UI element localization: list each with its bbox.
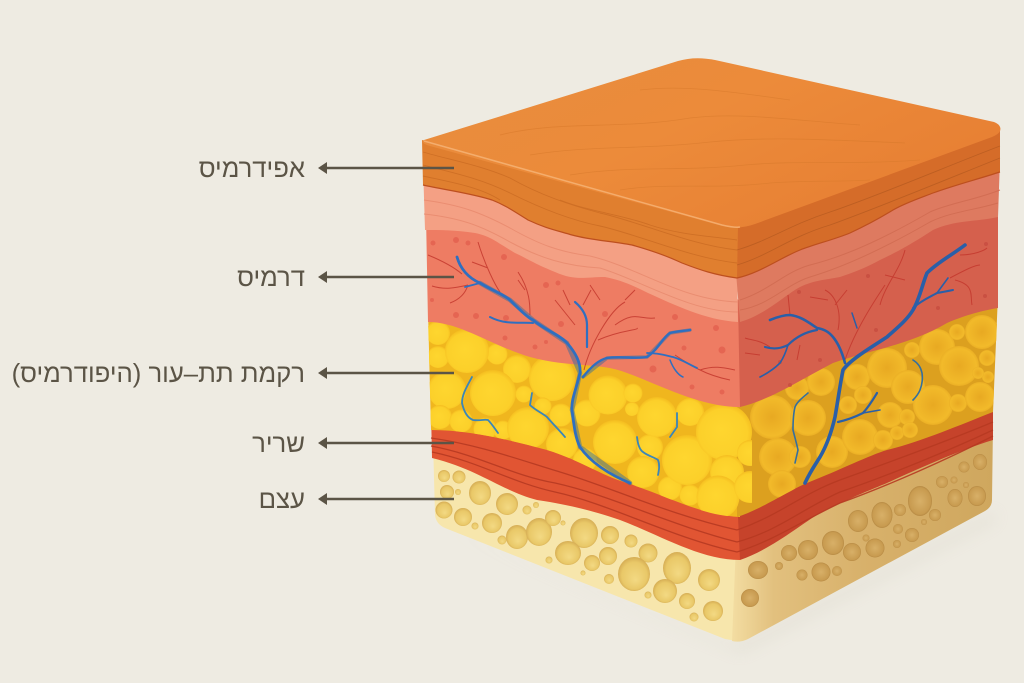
label: epidermis	[199, 155, 454, 183]
blood vessels	[457, 245, 965, 483]
label: bone: עצם	[259, 486, 305, 514]
skin cross-section cube	[422, 58, 1000, 652]
top surface grain	[500, 88, 920, 190]
fat cells right	[750, 315, 999, 498]
vessel outlines	[480, 283, 690, 483]
label: muscle: שריר	[252, 430, 305, 458]
layer: dermis	[426, 195, 998, 407]
top surface of skin	[423, 58, 1000, 228]
label: hypodermis: רקמת תת–עור (היפודרמיס)	[12, 360, 305, 388]
layer: muscle	[431, 395, 993, 560]
bone pores	[436, 470, 723, 622]
layer: upper dermis	[423, 160, 1000, 322]
label: dermis	[237, 264, 454, 292]
label: muscle	[252, 430, 454, 458]
cube shadow	[440, 512, 995, 652]
label: bone	[259, 486, 454, 514]
epidermis boundary line	[423, 172, 1000, 278]
layer: subcutaneous fat	[426, 295, 999, 518]
layer: epidermis	[422, 130, 1000, 278]
label: hypodermis	[12, 360, 454, 388]
layer: bone	[433, 425, 993, 642]
capillaries	[428, 242, 987, 380]
muscle fibres	[431, 422, 993, 552]
right veins	[760, 245, 965, 483]
dermis pores	[430, 237, 726, 394]
label: dermis: דרמיס	[237, 264, 305, 292]
fat cells left	[426, 321, 766, 518]
epidermis grain	[423, 146, 1000, 265]
front edge highlight	[424, 141, 740, 227]
left veins	[457, 257, 697, 483]
label: epidermis: אפידרמיס	[199, 155, 305, 183]
upper dermis fibres	[424, 190, 1000, 312]
